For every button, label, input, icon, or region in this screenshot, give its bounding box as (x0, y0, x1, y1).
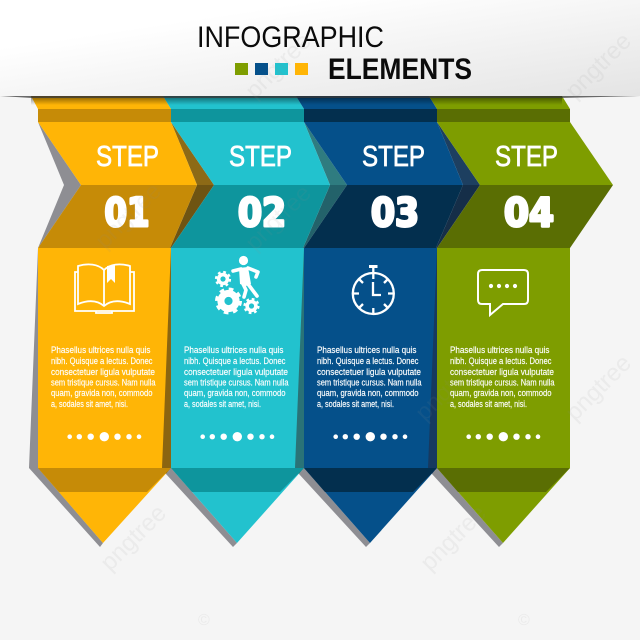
step labels: STEP (362, 141, 425, 173)
text block 1: sem tristique cursus. Nam nulla (51, 378, 156, 388)
text block 2: nibh. Quisque a lectus. Donec (184, 356, 286, 366)
text block 3: sem tristique cursus. Nam nulla (317, 378, 422, 388)
text block 3: nibh. Quisque a lectus. Donec (317, 356, 419, 366)
text block 1: nibh. Quisque a lectus. Donec (51, 356, 153, 366)
dots row 2 (200, 432, 274, 441)
text block 1: a, sodales sit amet, nisi. (51, 399, 128, 409)
text block 4: consectetuer ligula vulputate (450, 367, 554, 377)
step labels: STEP (96, 141, 159, 173)
text block 4 (450, 345, 555, 409)
text block 2: quam, gravida non, commodo (184, 388, 286, 398)
watermarks: pngtree (95, 500, 172, 576)
colour squares (235, 63, 308, 75)
dots row 1 (67, 432, 141, 441)
step numbers (104, 191, 554, 236)
text block 2: a, sodales sit amet, nisi. (184, 399, 261, 409)
title line 1: INFOGRAPHIC (197, 21, 384, 54)
watermarks: pngtree (560, 350, 637, 426)
step numbers: 02 (238, 191, 286, 236)
text block 3 (317, 345, 422, 409)
text block 2 (184, 345, 289, 409)
step labels: STEP (229, 141, 292, 173)
step numbers: 04 (504, 191, 554, 236)
icon: speech bubble (478, 270, 528, 315)
step labels: STEP (495, 141, 558, 173)
icon: open book (75, 264, 134, 313)
watermarks: © (198, 612, 210, 629)
step numbers: 01 (104, 191, 150, 236)
text block 4: sem tristique cursus. Nam nulla (450, 378, 555, 388)
header band (0, 0, 640, 98)
column 3: blue (296, 96, 480, 547)
icon: person on gears (216, 256, 258, 313)
text block 4: a, sodales sit amet, nisi. (450, 399, 527, 409)
text block 1: Phasellus ultrices nulla quis (51, 345, 151, 355)
text block 4: nibh. Quisque a lectus. Donec (450, 356, 552, 366)
step numbers: 03 (371, 191, 419, 236)
text block 3: Phasellus ultrices nulla quis (317, 345, 417, 355)
watermarks: pngtree (90, 178, 167, 254)
column 4: green (429, 96, 613, 547)
watermarks: pngtree (415, 500, 492, 576)
watermarks: pngtree (560, 28, 637, 104)
dots row 3 (333, 432, 407, 441)
text block 3: consectetuer ligula vulputate (317, 367, 421, 377)
text block 1 (51, 345, 156, 409)
step labels (96, 141, 558, 173)
text block 1: consectetuer ligula vulputate (51, 367, 155, 377)
text block 2: sem tristique cursus. Nam nulla (184, 378, 289, 388)
watermarks: pngtree (410, 350, 487, 426)
column 1: yellow (29, 96, 214, 547)
text block 4: Phasellus ultrices nulla quis (450, 345, 550, 355)
icon: stopwatch (353, 265, 394, 314)
title line 2: ELEMENTS (328, 53, 472, 86)
text block 3: quam, gravida non, commodo (317, 388, 419, 398)
watermarks: © (518, 612, 530, 629)
column 2: teal (163, 96, 347, 547)
watermarks: pngtree (240, 180, 317, 256)
text block 3: a, sodales sit amet, nisi. (317, 399, 394, 409)
text block 4: quam, gravida non, commodo (450, 388, 552, 398)
dots row 4 (466, 432, 540, 441)
text block 1: quam, gravida non, commodo (51, 388, 153, 398)
text block 2: Phasellus ultrices nulla quis (184, 345, 284, 355)
text block 2: consectetuer ligula vulputate (184, 367, 288, 377)
watermarks: pngtree (240, 28, 317, 104)
